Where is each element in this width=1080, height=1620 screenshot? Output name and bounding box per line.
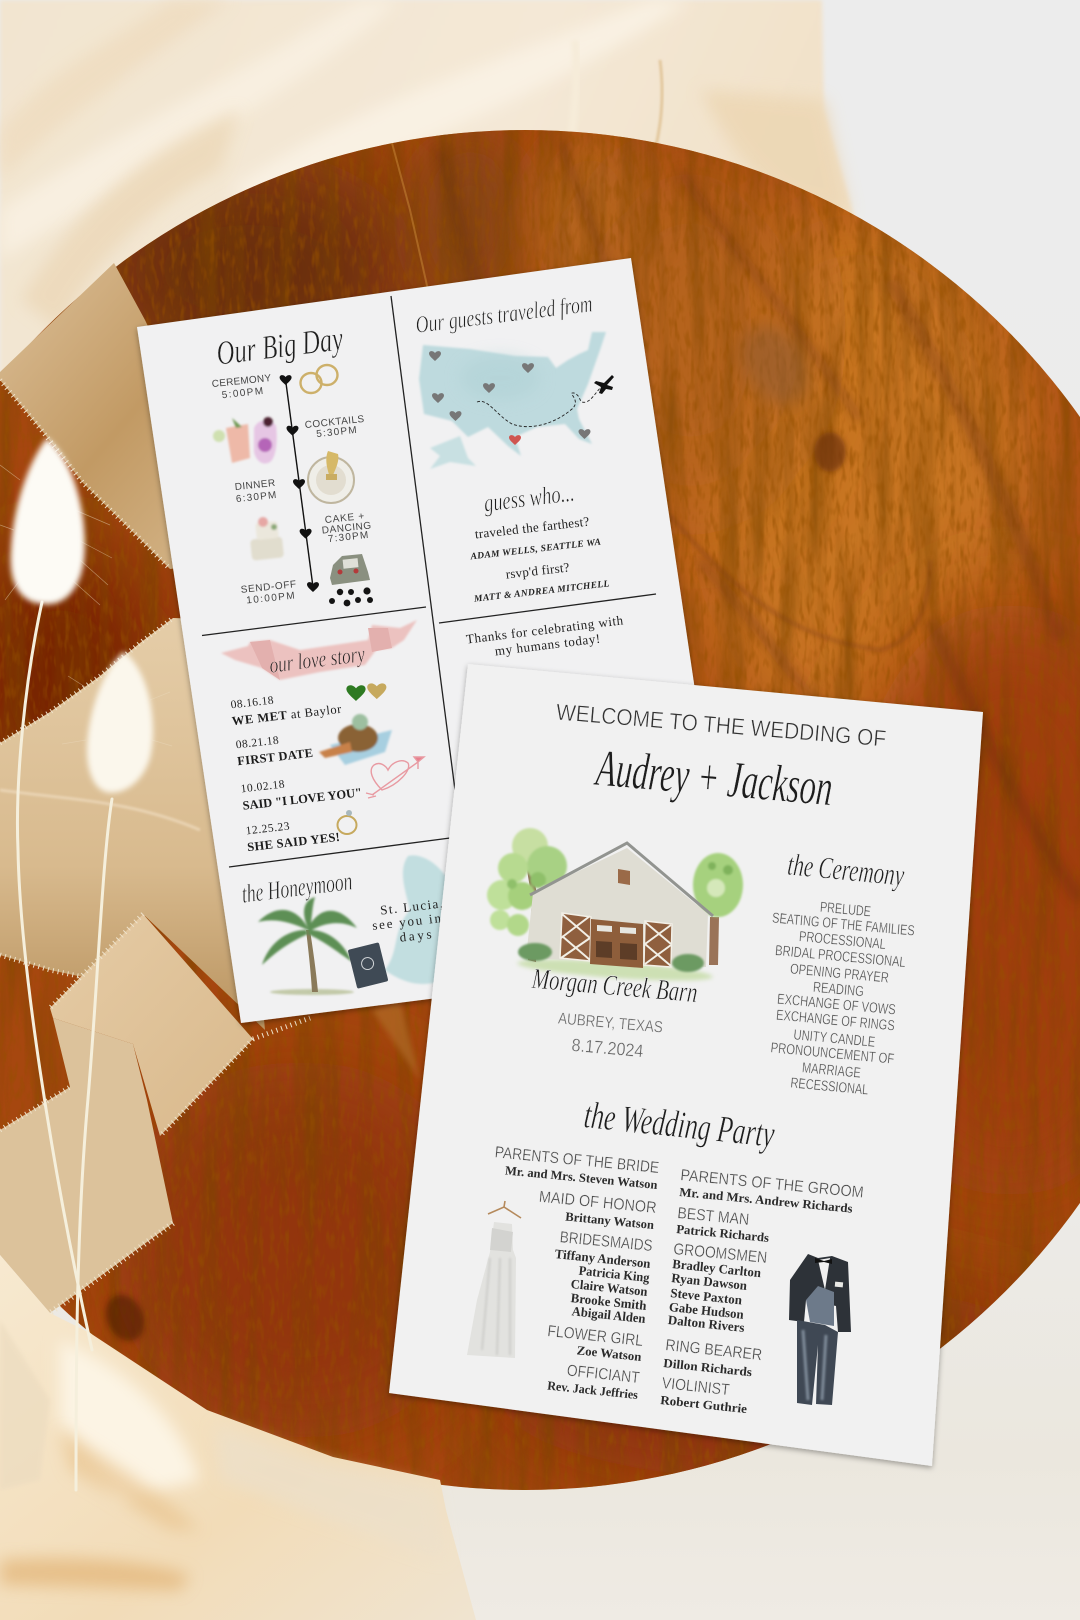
bride's side party list: MAID OF HONOR [538, 1189, 657, 1217]
bunny tail grass head right [62, 652, 172, 793]
love story timeline: 08.21.18 [235, 735, 280, 751]
loft vent [618, 869, 630, 885]
guess who text block: traveled the farthest? [474, 514, 590, 541]
map location hearts [429, 351, 590, 439]
ceremony order list: PRELUDE [819, 900, 872, 920]
groom's side party list [660, 1167, 864, 1416]
dried bunny tail grass stems [17, 602, 112, 1490]
love story timeline: 12.25.23 [245, 821, 290, 837]
icon: plate setting [308, 451, 354, 503]
timeline labels: CEREMONY [211, 373, 272, 390]
shrubs [518, 943, 704, 972]
bunny tail grass head left [0, 438, 112, 605]
heading: the Wedding Party: the Wedding Party [582, 1094, 777, 1156]
St. Lucia countdown note [371, 896, 444, 945]
timeline labels: DANCING [321, 520, 372, 537]
bride's side party list: BRIDESMAIDS [559, 1229, 653, 1255]
bride's side party list: Rev. Jack Jeffries [547, 1379, 639, 1402]
venue location and date: 8.17.2024 [571, 1035, 644, 1061]
timeline labels [211, 373, 372, 607]
guess who text block: rsvp'd first? [505, 559, 570, 582]
banner: our love story: our love story [268, 641, 367, 678]
barn roof [530, 843, 713, 916]
groom's side party list: GROOMSMEN [673, 1241, 768, 1267]
icon: cocktails [213, 417, 277, 464]
timeline labels: 10:00PM [246, 590, 296, 607]
groom's side party list: Dillon Richards [663, 1356, 753, 1379]
ceremony order list: PROCESSIONAL [798, 929, 886, 953]
banner: our love story [221, 620, 417, 680]
ceremony order list: RECESSIONAL [790, 1075, 869, 1099]
ceremony order list: EXCHANGE OF RINGS [775, 1008, 895, 1034]
bride's side party list [494, 1144, 660, 1402]
love story timeline: SHE SAID YES! [247, 830, 341, 854]
groom's side party list: Ryan Dawson [671, 1270, 749, 1293]
groom's side party list: PARENTS OF THE GROOM [680, 1167, 864, 1202]
love story timeline: 08.16.18 [230, 695, 274, 711]
barn walls [526, 848, 708, 967]
icon: engagement ring [338, 810, 356, 834]
groom's side party list: Steve Paxton [670, 1285, 744, 1308]
bride's side party list: Brooke Smith [570, 1290, 648, 1313]
guess who text block [469, 480, 610, 605]
icon: passport [348, 942, 388, 989]
timeline labels: 7:30PM [327, 530, 369, 545]
illustration: wedding dress on hanger [467, 1201, 521, 1358]
bride's side party list: Brittany Watson [565, 1210, 655, 1232]
love story timeline [230, 695, 363, 854]
fabric: hanging ribbon tail [0, 1018, 173, 1313]
bride's side party list: FLOWER GIRL [547, 1323, 644, 1350]
ceremony order list [770, 900, 915, 1099]
timeline labels: SEND-OFF [240, 579, 297, 596]
map: St. Lucia watercolor [385, 855, 450, 984]
dashed flight path [477, 386, 602, 427]
fabric: folded ribbon end [50, 914, 310, 1136]
groom's side party list: VIOLINIST [661, 1375, 731, 1399]
timeline labels: 5:30PM [316, 425, 358, 440]
icon: getaway truck with cans [329, 554, 373, 606]
fabric: tan ribbon across middle left [0, 618, 265, 1030]
guess who text block: MATT & ANDREA MITCHELL [473, 579, 610, 605]
St. Lucia countdown note: see you in [371, 910, 442, 933]
ceremony order list: SEATING OF THE FAMILIES [771, 910, 915, 940]
bride's side party list: Claire Watson [570, 1276, 649, 1299]
St. Lucia countdown note: St. Lucia, [379, 896, 444, 918]
icon: picnic basket [319, 714, 392, 765]
front card: wedding program [389, 664, 983, 1466]
timeline labels: COCKTAILS [304, 414, 365, 431]
ceremony order list: OPENING PRAYER [789, 961, 889, 987]
love story timeline: 10.02.18 [240, 779, 285, 795]
thank-you note: my humans today! [494, 631, 601, 658]
ground [517, 955, 713, 985]
card sheet [137, 258, 735, 1023]
ceremony order list: UNITY CANDLE [793, 1027, 876, 1051]
heading: the Ceremony: the Ceremony [786, 847, 906, 893]
bride's side party list: PARENTS OF THE BRIDE [494, 1144, 660, 1177]
heading: Our Big Day: Our Big Day [214, 320, 346, 373]
timeline labels: 6:30PM [235, 490, 277, 505]
illustration: groom's tuxedo [789, 1254, 851, 1405]
love story timeline: FIRST DATE [236, 746, 314, 768]
love story timeline: SAID "I LOVE YOU" [242, 785, 363, 813]
layout dividers [202, 296, 656, 867]
venue name: Morgan Creek Barn [530, 963, 699, 1009]
St. Lucia countdown note: days [399, 926, 432, 945]
right tree [693, 853, 743, 965]
groom's side party list: Robert Guthrie [660, 1393, 748, 1416]
thank-you note: Thanks for celebrating with [465, 612, 624, 647]
groom's side party list: Gabe Hudson [668, 1299, 745, 1322]
icon: palm tree [258, 897, 357, 995]
back card: day-of timeline, map and story [137, 258, 735, 1023]
illustration: barn with trees [487, 828, 743, 985]
bride's side party list: Patricia King [578, 1263, 651, 1285]
timeline labels: CAKE + [324, 511, 365, 526]
couple names: Audrey + Jackson [592, 740, 835, 817]
ceremony order list: PRONOUNCEMENT OF [770, 1040, 895, 1068]
barn sliding doors [560, 913, 672, 967]
timeline with hearts [280, 375, 319, 592]
groom's side party list: RING BEARER [665, 1337, 763, 1364]
venue location and date [557, 1010, 663, 1061]
bride's side party list: OFFICIANT [566, 1362, 641, 1387]
icon: airplane [594, 375, 614, 394]
groom's side party list: Mr. and Mrs. Andrew Richards [679, 1185, 853, 1216]
timeline labels: 5:00PM [221, 386, 264, 401]
heading: Our guests traveled from: Our guests traveled from [414, 291, 594, 339]
heading: the Honeymoon: the Honeymoon [240, 866, 354, 909]
card sheet [389, 664, 983, 1466]
love story timeline: WE MET at Baylor [231, 702, 343, 728]
icon: green and gold hearts [346, 683, 386, 701]
bride's side party list: Mr. and Mrs. Steven Watson [504, 1163, 658, 1192]
guess who text block: ADAM WELLS, SEATTLE WA [469, 538, 601, 563]
icon: wedding rings [300, 365, 338, 393]
left tree [487, 828, 567, 962]
title line: WELCOME TO THE WEDDING OF [555, 699, 887, 752]
groom's side party list: BEST MAN [677, 1205, 750, 1229]
icon: heart and arrow [366, 757, 424, 798]
ceremony order list: MARRIAGE [801, 1060, 862, 1082]
icon: wedding cake [250, 517, 284, 561]
barn center doors [590, 919, 643, 968]
fabric: tan frayed ribbon upper left [0, 263, 260, 569]
bride's side party list: Abigail Alden [571, 1303, 647, 1326]
timeline labels: DINNER [234, 478, 276, 493]
venue location and date: AUBREY, TEXAS [557, 1010, 663, 1037]
ceremony order list: EXCHANGE OF VOWS [776, 992, 896, 1018]
bride's side party list: Tiffany Anderson [554, 1246, 652, 1271]
ceremony order list: READING [812, 980, 864, 1000]
fabric: cream drape lower left [0, 1255, 476, 1620]
map: watercolor United States [419, 332, 614, 469]
ceremony order list: BRIDAL PROCESSIONAL [774, 943, 906, 971]
guess who text block: guess who... [482, 480, 576, 518]
groom's side party list: Patrick Richards [676, 1222, 770, 1245]
groom's side party list: Dalton Rivers [667, 1312, 745, 1335]
bride's side party list: Zoe Watson [576, 1343, 642, 1364]
groom's side party list: Bradley Carlton [672, 1256, 763, 1280]
fabric: sheer cream tulle at top left [0, 0, 855, 560]
